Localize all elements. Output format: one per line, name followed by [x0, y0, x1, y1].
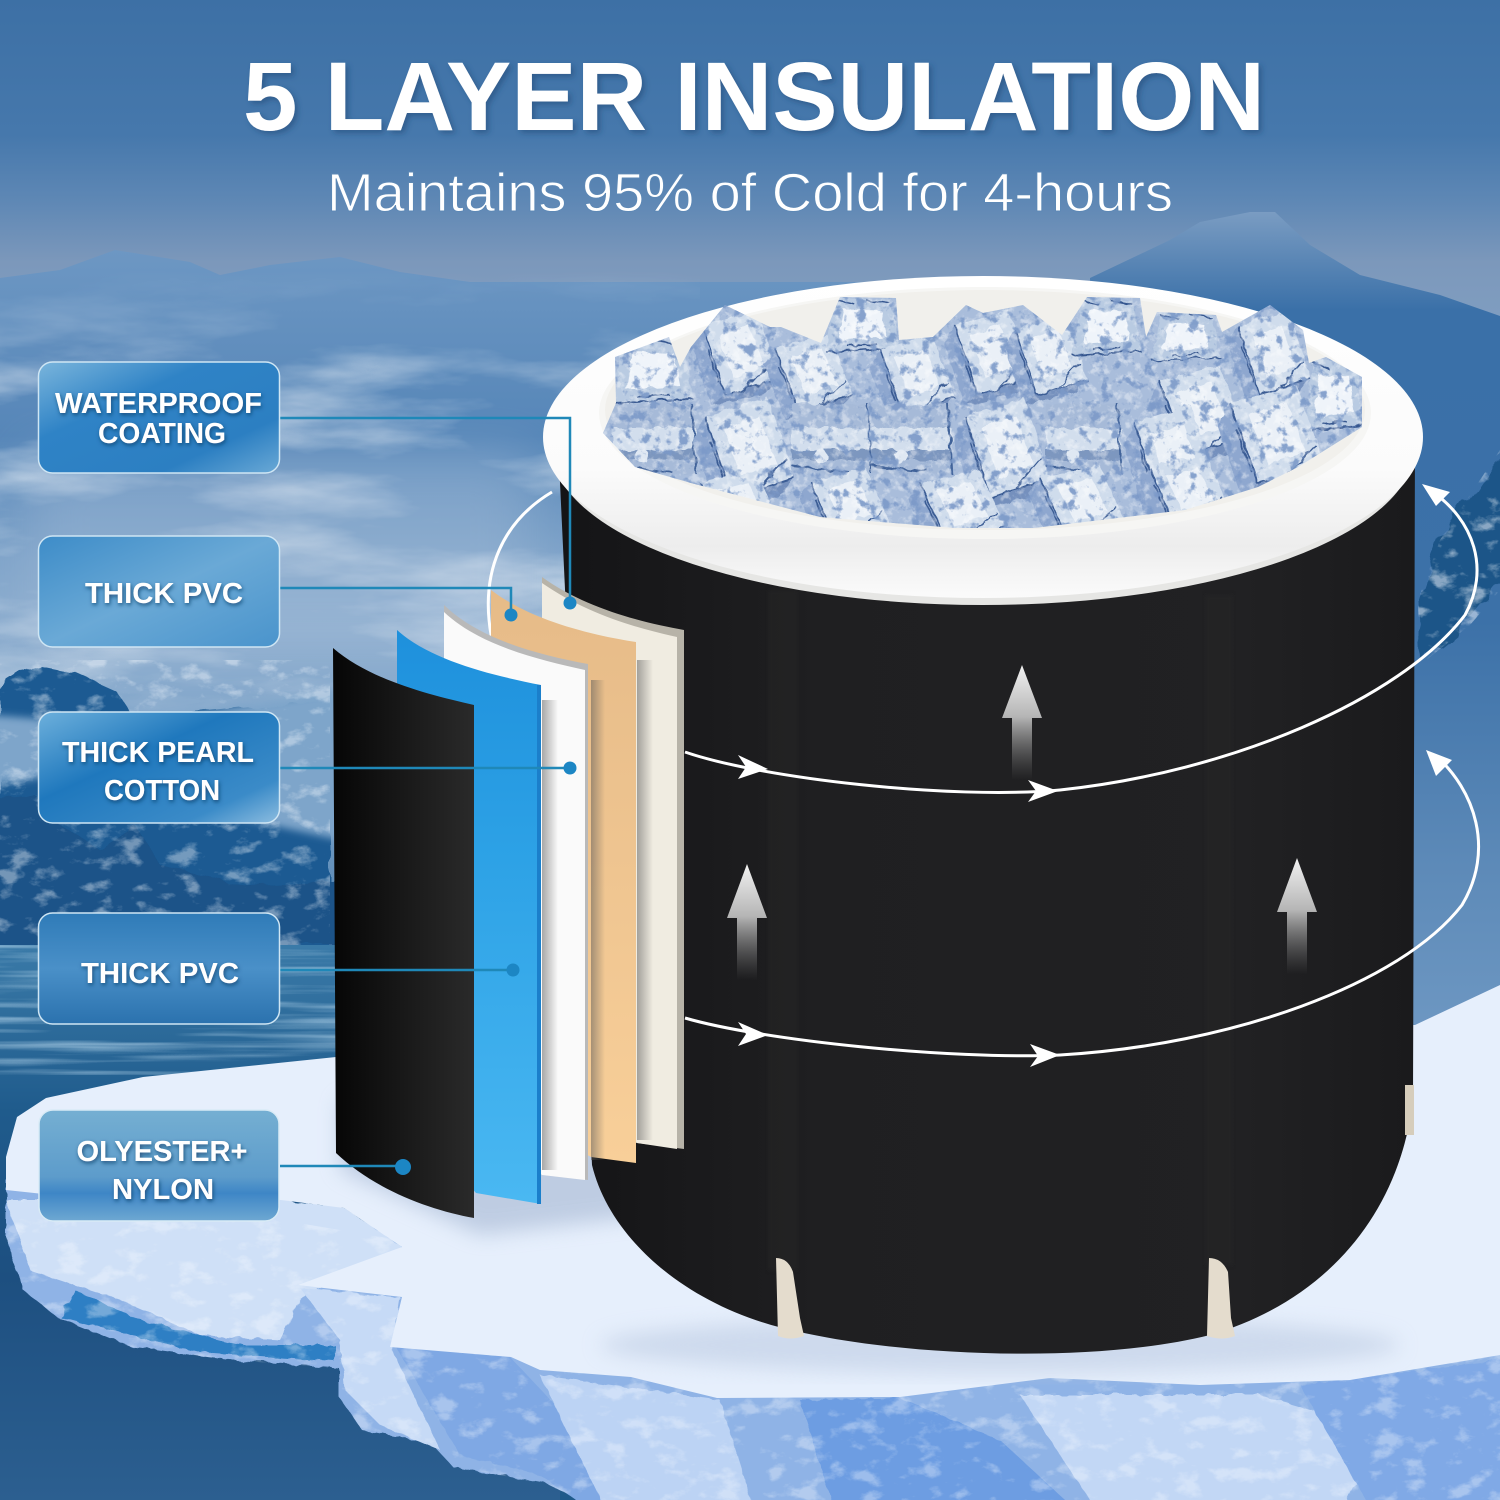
front face of the floe [6, 1157, 1500, 1500]
layer: white pearl cotton [444, 605, 588, 1180]
up arrow: right [1277, 858, 1317, 974]
front row [612, 404, 696, 474]
band arrow: lower [685, 750, 1479, 1067]
tub body [558, 440, 1415, 1354]
ice cubes [603, 297, 1362, 528]
bottom row [698, 470, 770, 504]
top surface of the floe [6, 985, 1500, 1398]
label: polyester and nylon: OLYESTER+ [76, 1136, 248, 1168]
up arrow: center [1002, 665, 1042, 780]
rocky mountains right [1418, 440, 1500, 660]
left arc arrow segment [488, 492, 552, 640]
floor shadow [600, 1317, 1400, 1373]
band arrow: upper [685, 484, 1477, 802]
ice face texture [0, 1190, 1500, 1500]
tub rim [543, 276, 1423, 605]
title: 5 LAYER INSULATION [243, 42, 1265, 151]
leader lines [280, 418, 570, 1166]
ice floe [0, 985, 1500, 1500]
label: thick pearl cotton: COTTON [104, 775, 220, 807]
label: polyester and nylon: NYLON [112, 1174, 214, 1206]
tub feet [776, 1258, 1235, 1338]
up arrow: left [727, 864, 767, 980]
label: thick PVC: THICK PVC [85, 578, 243, 610]
layer: black polyester and nylon [333, 648, 474, 1218]
label: thick PVC lower: THICK PVC [81, 958, 239, 990]
layer: cream coating [542, 577, 684, 1149]
layer: tan PVC [491, 590, 636, 1163]
label: thick pearl cotton [38, 712, 280, 823]
exploded insulation layers [333, 577, 684, 1218]
label: waterproof coating: WATERPROOF [55, 388, 262, 420]
label: polyester and nylon [39, 1110, 279, 1221]
cloud streaks [0, 297, 638, 709]
back row [613, 337, 693, 405]
label: thick PVC lower [38, 913, 280, 1024]
haze band [30, 450, 530, 650]
distant peak right [1090, 212, 1500, 1030]
label: thick pearl cotton: THICK PEARL [62, 737, 254, 769]
dark rocky mountains left [0, 665, 330, 960]
subtitle: Maintains 95% of Cold for 4-hours [327, 163, 1173, 223]
label: thick PVC [38, 536, 280, 647]
water [0, 945, 560, 1500]
label: waterproof coating [38, 362, 280, 473]
distant ridge left [0, 250, 1100, 560]
tub poles [768, 590, 1414, 1270]
leader dots [395, 596, 576, 1175]
layer: blue PVC [397, 630, 541, 1204]
label: waterproof coating: COATING [98, 418, 226, 450]
